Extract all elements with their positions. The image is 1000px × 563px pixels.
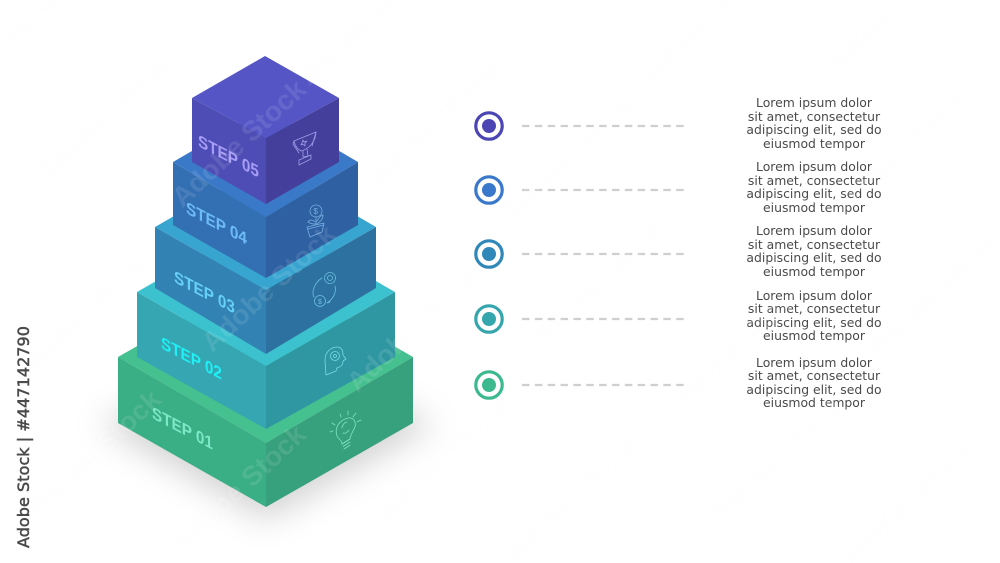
- watermark pattern: Adobe Stock: [195, 218, 342, 358]
- marker row 4: [476, 306, 684, 332]
- icon: coin plant: [307, 205, 324, 237]
- text block 5: eiusmod tempor: [763, 395, 866, 410]
- watermark pattern: Adobe Stock: [665, 273, 812, 413]
- text block 2: adipiscing elit, sed do: [746, 186, 882, 201]
- text block 5: adipiscing elit, sed do: [746, 382, 882, 397]
- marker row 3: [476, 241, 684, 267]
- ground shadow: [100, 340, 435, 520]
- watermark pattern: Adobe Stock: [703, 388, 850, 528]
- text block 3: adipiscing elit, sed do: [746, 250, 882, 265]
- marker row 5: [476, 372, 684, 398]
- step 01 block: [118, 272, 413, 507]
- watermark pattern: Adobe Stock: [30, 48, 177, 188]
- text block 3: Lorem ipsum dolor: [756, 223, 873, 238]
- text block 4: eiusmod tempor: [763, 328, 866, 343]
- icon: light bulb: [330, 411, 361, 449]
- pyramid: [118, 56, 413, 507]
- watermark pattern: Adobe Stock: [360, 53, 507, 193]
- step 04 label: STEP 04: [186, 197, 247, 249]
- text block 1: sit amet, consectetur: [748, 109, 881, 124]
- watermark pattern: Adobe Stock: [340, 258, 487, 398]
- marker row 2: [476, 177, 684, 203]
- watermark pattern: Adobe Stock: [525, 213, 672, 353]
- text block 2: sit amet, consectetur: [748, 173, 881, 188]
- step 03 label: STEP 03: [174, 266, 235, 318]
- icon: gear and coin cycle: [313, 272, 336, 306]
- step 02 label: STEP 02: [161, 332, 222, 384]
- watermark pattern: Adobe Stock: [495, 88, 642, 228]
- watermark pattern: Adobe Stock: [370, 388, 517, 528]
- text block 5: sit amet, consectetur: [748, 368, 881, 383]
- text block 4: sit amet, consectetur: [748, 301, 881, 316]
- icon: head with gear: [325, 347, 346, 375]
- marker row 1: [476, 113, 684, 139]
- text block 2: Lorem ipsum dolor: [756, 159, 873, 174]
- step 02 block: [137, 218, 395, 429]
- step 05 label: STEP 05: [198, 130, 259, 182]
- watermark pattern: Adobe Stock: [165, 418, 312, 558]
- text block 1: Lorem ipsum dolor: [756, 95, 873, 110]
- watermark pattern: Adobe Stock: [825, 83, 972, 223]
- watermark pattern: Adobe Stock: [20, 383, 167, 523]
- text block 4: adipiscing elit, sed do: [746, 315, 882, 330]
- step 03 block: [155, 163, 376, 354]
- watermark pattern: Adobe Stock: [5, 248, 152, 388]
- text block 1: eiusmod tempor: [763, 136, 866, 151]
- icon: gear and coin cycle: $: [318, 299, 322, 306]
- icon: trophy: [293, 132, 316, 165]
- text block 4: Lorem ipsum dolor: [756, 288, 873, 303]
- watermark pattern: Adobe Stock: [165, 73, 312, 213]
- step 04 block: [173, 108, 358, 278]
- text block 5: Lorem ipsum dolor: [756, 355, 873, 370]
- icon: coin plant: $: [314, 207, 318, 216]
- text block 3: eiusmod tempor: [763, 264, 866, 279]
- text block 3: sit amet, consectetur: [748, 237, 881, 252]
- step 05 block: [192, 56, 339, 204]
- text block 1: adipiscing elit, sed do: [746, 122, 882, 137]
- text block 2: eiusmod tempor: [763, 200, 866, 215]
- credit text: Adobe Stock | #447142790: [14, 326, 33, 548]
- step 01 label: STEP 01: [152, 402, 213, 454]
